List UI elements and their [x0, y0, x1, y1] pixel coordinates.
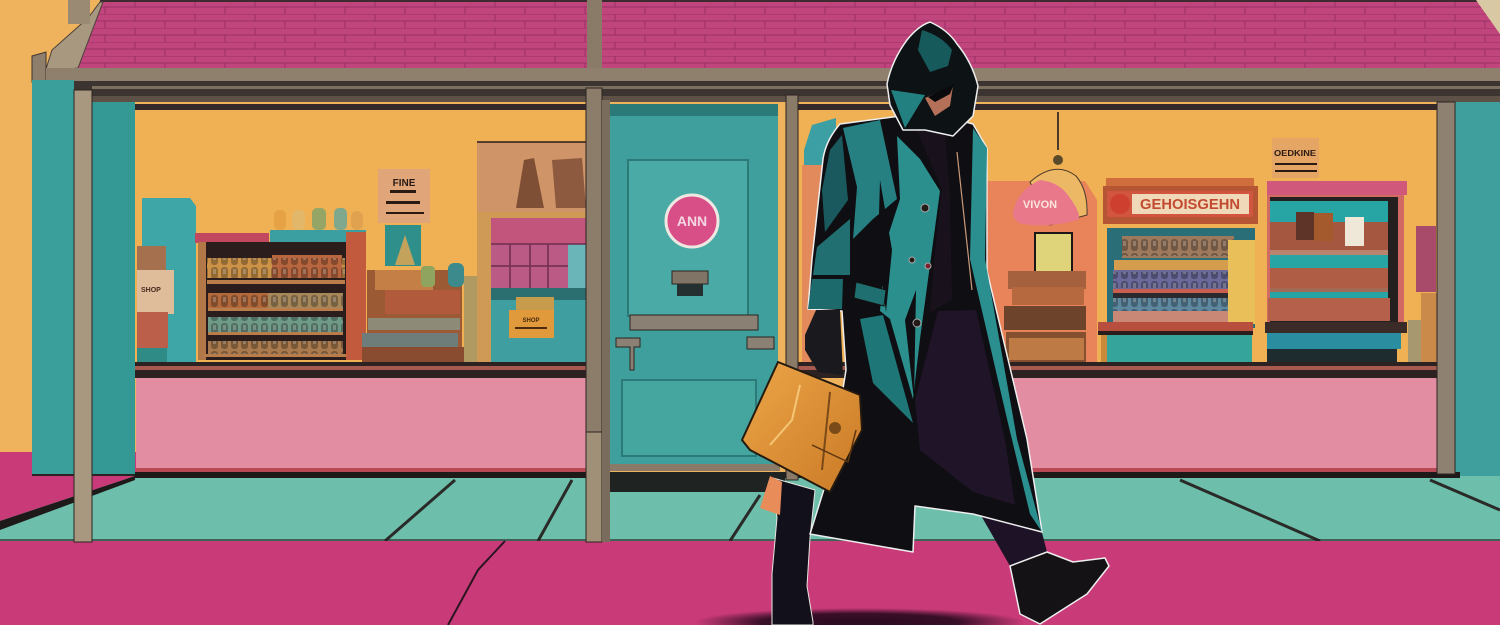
face	[925, 86, 953, 116]
door letterbox	[672, 271, 708, 296]
front leg lower	[975, 505, 1047, 566]
small price sign	[509, 297, 554, 338]
coat buttons	[909, 204, 931, 327]
back leg and boot	[772, 478, 815, 625]
hood	[887, 22, 978, 136]
note above right case: OEDKINE	[1274, 149, 1317, 158]
trousers inside coat	[915, 310, 1015, 505]
window display: poster sign: FINE	[393, 178, 416, 189]
sidewalk	[0, 472, 1500, 542]
door lower panel	[622, 380, 756, 456]
inner shirt	[917, 130, 952, 312]
teal shape behind figure	[804, 118, 836, 165]
note above right case	[1272, 138, 1319, 178]
door round sign	[666, 195, 718, 247]
left teal wall	[32, 80, 135, 477]
window display: tall right cabinet	[477, 142, 587, 362]
door handles	[616, 337, 774, 370]
left shop window	[135, 104, 587, 362]
window display: poster sign	[378, 169, 430, 223]
stacked crates	[1004, 271, 1086, 362]
shop door	[610, 104, 780, 471]
shoe	[1010, 552, 1109, 624]
window display: left stacked goods	[137, 246, 174, 362]
coat body	[808, 112, 1042, 552]
door bar	[630, 315, 758, 330]
door upper panel	[628, 160, 748, 316]
small price sign: SHOP	[522, 318, 540, 324]
centre display case	[1098, 178, 1258, 362]
window display: teal framed picture	[385, 225, 421, 266]
coat fold shadows	[878, 180, 916, 400]
right display case	[1265, 181, 1407, 362]
hooded figure	[742, 22, 1109, 625]
small framed note	[1035, 233, 1072, 273]
coat pocket flap	[854, 282, 886, 306]
right teal wall	[1455, 102, 1500, 476]
case sign: GEHOISGEHN	[1140, 197, 1240, 213]
posts	[74, 88, 1455, 542]
window display: right side crates	[362, 263, 477, 362]
coat teal panels	[808, 120, 1042, 532]
window display: main shelves	[195, 230, 366, 360]
window display: blue cabinet	[142, 198, 196, 362]
shop roof	[32, 0, 1500, 82]
right window sill and pink panel	[798, 362, 1446, 473]
glove	[805, 310, 843, 375]
door round sign: ANN	[677, 213, 707, 229]
case sign	[1107, 191, 1253, 217]
orange back wall	[985, 181, 1097, 362]
hanging sign: VIVON	[1023, 199, 1057, 211]
pavement shadow	[695, 608, 1025, 625]
hanging sign	[1013, 112, 1087, 225]
bag	[742, 362, 862, 515]
window display: jars on top of shelf	[274, 208, 363, 230]
left window sill and pink panel	[135, 362, 587, 473]
window display: left stacked goods: SHOP	[141, 287, 161, 294]
roof eave beam	[40, 68, 1500, 102]
magenta pavement	[0, 541, 1500, 625]
right shop window	[798, 104, 1438, 362]
coat edge line	[957, 152, 972, 290]
small items far right	[1408, 226, 1437, 362]
